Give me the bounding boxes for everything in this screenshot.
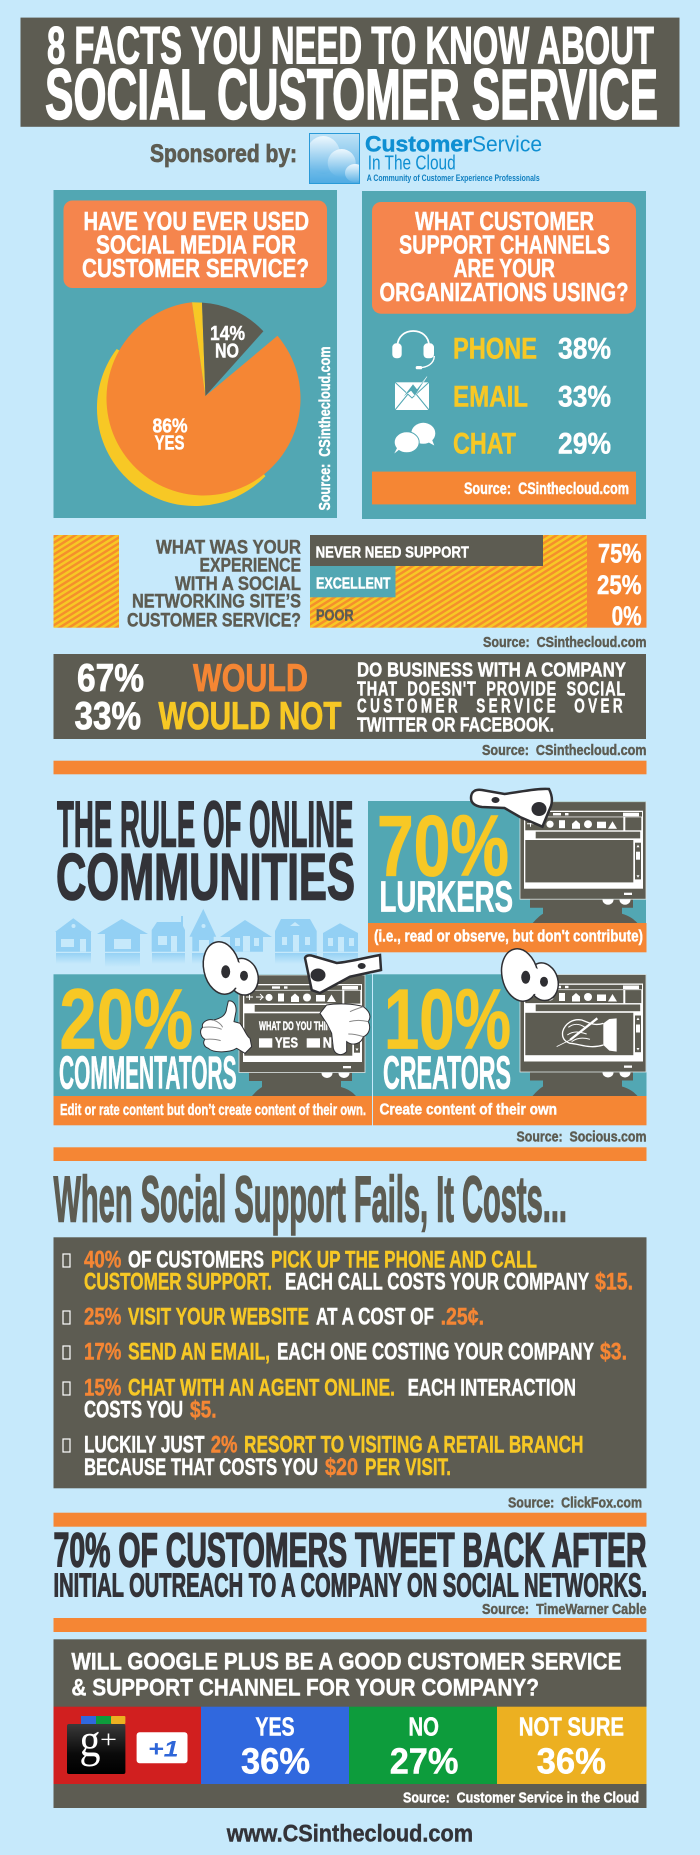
row: phone: [453, 332, 611, 365]
source bar: [372, 472, 636, 504]
panel: google plus poll: [54, 1639, 646, 1808]
lurkers caption: [368, 923, 646, 952]
heading: channels question: ORGANIZATIONS USING?: [380, 277, 628, 307]
source: Source: CSinthecloud.com: [483, 634, 646, 651]
panel: cost list: [54, 1237, 646, 1488]
footer url: www.CSinthecloud.com: [226, 1821, 473, 1848]
list item: 40% phone: CUSTOMER SUPPORT.: [84, 1268, 272, 1295]
google plus logo cell: g: [80, 1715, 100, 1768]
stripe block left: [54, 535, 119, 628]
panel: 20% commentators: NO: [323, 1035, 342, 1052]
row: email: [453, 380, 611, 413]
pie chart: 86% yes, 14% no: YES: [154, 433, 184, 455]
panel: would / would not: WOULD NOT: [158, 695, 342, 738]
icon: headset: [392, 331, 434, 369]
panel: would / would not: TWITTER OR FACEBOOK.: [357, 715, 554, 737]
poll question: & SUPPORT CHANNEL FOR YOUR COMPANY?: [71, 1674, 539, 1701]
panel: would / would not: 67%: [77, 657, 144, 700]
row: email: EMAIL: [453, 380, 528, 413]
source: Source: Customer Service in the Cloud: [403, 1789, 639, 1806]
source: Source: ClickFox.com: [508, 1494, 642, 1511]
orange divider: [54, 761, 646, 774]
orange divider: [54, 1147, 646, 1161]
list item: 15% chat: CHAT WITH AN AGENT ONLINE.: [128, 1374, 395, 1401]
bar chart: POOR: [316, 607, 354, 624]
panel: 10% creators: 10%: [384, 972, 511, 1067]
title banner: [20, 17, 680, 135]
panel: 70% lurkers: [368, 789, 646, 952]
poll: yes: YES: [255, 1714, 295, 1742]
heading: social media question: HAVE YOU EVER USED: [84, 206, 309, 236]
creator round eyes: [497, 945, 562, 1005]
list item: 15% chat: 15%: [84, 1374, 121, 1401]
pie chart: 86% yes, 14% no: 14%: [210, 323, 245, 345]
houses illustration: [55, 908, 358, 967]
question text: WHAT WAS YOUR: [156, 536, 301, 558]
list item: 40% phone: 40%: [84, 1246, 121, 1273]
panel: 20% commentators: WHAT DO YOU THINK?: [259, 1019, 341, 1033]
question text: NETWORKING SITE’S: [132, 591, 301, 613]
bar chart: EXCELLENT: [316, 576, 391, 593]
list item: 25% website: AT A COST OF: [316, 1303, 434, 1330]
poll: not sure: [497, 1707, 646, 1784]
list item: 15% chat: EACH INTERACTION: [408, 1374, 576, 1401]
panel: 70% lurkers: 70%: [377, 799, 509, 895]
heading: rule of online communities: COMMUNITIES: [56, 839, 355, 913]
pie chart: 86% yes, 14% no: [97, 302, 301, 506]
list item: 15% chat: $5.: [190, 1396, 216, 1423]
row: chat: [453, 428, 611, 461]
icon: chat bubbles: [394, 423, 435, 454]
bar chart: NEVER NEED SUPPORT: [316, 545, 469, 562]
poll: no: NO: [408, 1714, 439, 1742]
list item: 40% phone: PICK UP THE PHONE AND CALL: [271, 1246, 537, 1273]
sponsor line: Sponsored by:: [150, 140, 297, 168]
panel: 20% commentators: [54, 938, 381, 1125]
poll: no: 27%: [390, 1740, 458, 1781]
commentator squint eyes: [305, 955, 381, 993]
list item: 17% email: 17%: [84, 1338, 121, 1365]
row: chat: 29%: [558, 428, 611, 461]
poll: yes: [201, 1707, 349, 1784]
orange divider: [54, 1618, 646, 1632]
row: phone: PHONE: [453, 332, 537, 365]
poll: not sure: 36%: [537, 1740, 606, 1781]
row: phone: 38%: [558, 332, 611, 365]
list item: 17% email: $3.: [600, 1338, 627, 1365]
source: Source: Socious.com: [516, 1129, 646, 1146]
row: chat: CHAT: [453, 428, 516, 461]
icon: email envelope: [395, 376, 429, 410]
icon: thumbs up: [201, 1001, 252, 1053]
logo: wordmark: A Community of Customer Experience Professionals: [367, 173, 540, 184]
logo: wordmark: Service: [472, 132, 542, 157]
logo: wordmark: Customer: [365, 132, 472, 157]
list item: 2% retail: 2%: [211, 1431, 238, 1458]
panel: would / would not: WOULD: [193, 657, 308, 700]
list item: 15% chat: [63, 1374, 576, 1423]
commentators caption: Edit or rate content but don’t create content of their own.: [60, 1102, 366, 1119]
commentator round eyes: [199, 938, 262, 998]
heading: channels question: SUPPORT CHANNELS: [399, 230, 610, 260]
list item: 40% phone: $15.: [595, 1268, 633, 1295]
source: Source: CSinthecloud.com: [482, 742, 646, 759]
source: Source: TimeWarner Cable: [482, 1601, 646, 1618]
heading: social media question: [64, 200, 327, 288]
list item: 40% phone: [63, 1246, 633, 1295]
callout: 70% tweet back: [54, 1524, 647, 1604]
panel: would / would not: DO BUSINESS WITH A COMPANY: [357, 660, 627, 682]
row: email: 33%: [558, 380, 611, 413]
panel: 20% commentators: 20%: [60, 972, 193, 1067]
panel: support channels: [362, 191, 646, 519]
list item: 15% chat: COSTS YOU: [84, 1396, 183, 1423]
question text: [127, 536, 301, 632]
list item: 17% email: SEND AN EMAIL,: [128, 1338, 270, 1365]
panel: 20% commentators: COMMENTATORS: [59, 1046, 236, 1098]
heading: channels question: WHAT CUSTOMER: [415, 206, 594, 236]
poll: no: [349, 1707, 497, 1784]
list item: 2% retail: $20: [325, 1454, 358, 1481]
icon: writing hand: [557, 1018, 617, 1052]
list item: 25% website: VISIT YOUR WEBSITE: [128, 1303, 309, 1330]
panel: 10% creators: CREATORS: [383, 1046, 511, 1098]
bar chart: [310, 535, 646, 631]
poll question: [71, 1648, 621, 1701]
heading: rule of online communities: [56, 788, 355, 913]
list item: 25% website: .25¢.: [441, 1303, 484, 1330]
list item: 2% retail: [63, 1431, 584, 1481]
question text: EXPERIENCE: [200, 555, 301, 577]
creators caption: Create content of their own: [380, 1101, 557, 1118]
google plus logo cell: [54, 1707, 201, 1784]
list item: 17% email: [63, 1338, 627, 1365]
list item: 25% website: 25%: [84, 1303, 121, 1330]
panel: 20% commentators: YES: [275, 1035, 298, 1052]
list item: 2% retail: BECAUSE THAT COSTS YOU: [84, 1454, 318, 1481]
list item: 2% retail: LUCKILY JUST: [84, 1431, 205, 1458]
poll: yes: 36%: [241, 1740, 310, 1781]
poll: not sure: NOT SURE: [519, 1714, 624, 1742]
heading: channels question: ARE YOUR: [454, 253, 555, 283]
lurker eyes: [471, 789, 552, 827]
logo: wordmark: In The Cloud: [368, 152, 456, 174]
sponsor line: [150, 132, 542, 184]
panel: have you used social media: [54, 190, 337, 518]
bar chart: 75%: [598, 539, 642, 569]
list item: 2% retail: PER VISIT.: [365, 1454, 451, 1481]
panel: would / would not: 33%: [74, 695, 141, 738]
question text: CUSTOMER SERVICE?: [127, 610, 301, 632]
list item: 25% website: [63, 1303, 484, 1330]
icon: thumbs down: [320, 1004, 370, 1055]
heading: social media question: CUSTOMER SERVICE?: [82, 253, 309, 283]
panel: social network experience: [54, 535, 646, 651]
bar chart: 25%: [597, 570, 642, 600]
heading: channels question: [372, 202, 636, 314]
logo: wordmark: [365, 132, 542, 184]
logo: cloud icon: [309, 133, 360, 184]
source bar: Source: CSinthecloud.com: [464, 480, 629, 498]
pie chart: 86% yes, 14% no: NO: [215, 340, 239, 362]
google plus logo cell: +1: [148, 1737, 179, 1762]
panel: would / would not: [54, 654, 646, 739]
creators caption: [373, 1096, 646, 1125]
source: rotated: Source: CSinthecloud.com: [317, 346, 334, 510]
heading: social media question: SOCIAL MEDIA FOR: [96, 230, 296, 260]
commentators caption: [54, 1096, 372, 1125]
lurkers caption: (i.e., read or observe, but don't contribute): [374, 928, 643, 946]
pie chart: 86% yes, 14% no: 86%: [152, 416, 188, 438]
list item: 40% phone: OF CUSTOMERS: [128, 1246, 264, 1273]
bar chart: 0%: [612, 601, 642, 631]
panel: 10% creators: [373, 945, 646, 1125]
panel: 70% lurkers: LURKERS: [380, 874, 513, 922]
question text: WITH A SOCIAL: [175, 573, 301, 595]
orange divider: [54, 1513, 646, 1527]
google plus logo cell: +: [100, 1727, 117, 1754]
